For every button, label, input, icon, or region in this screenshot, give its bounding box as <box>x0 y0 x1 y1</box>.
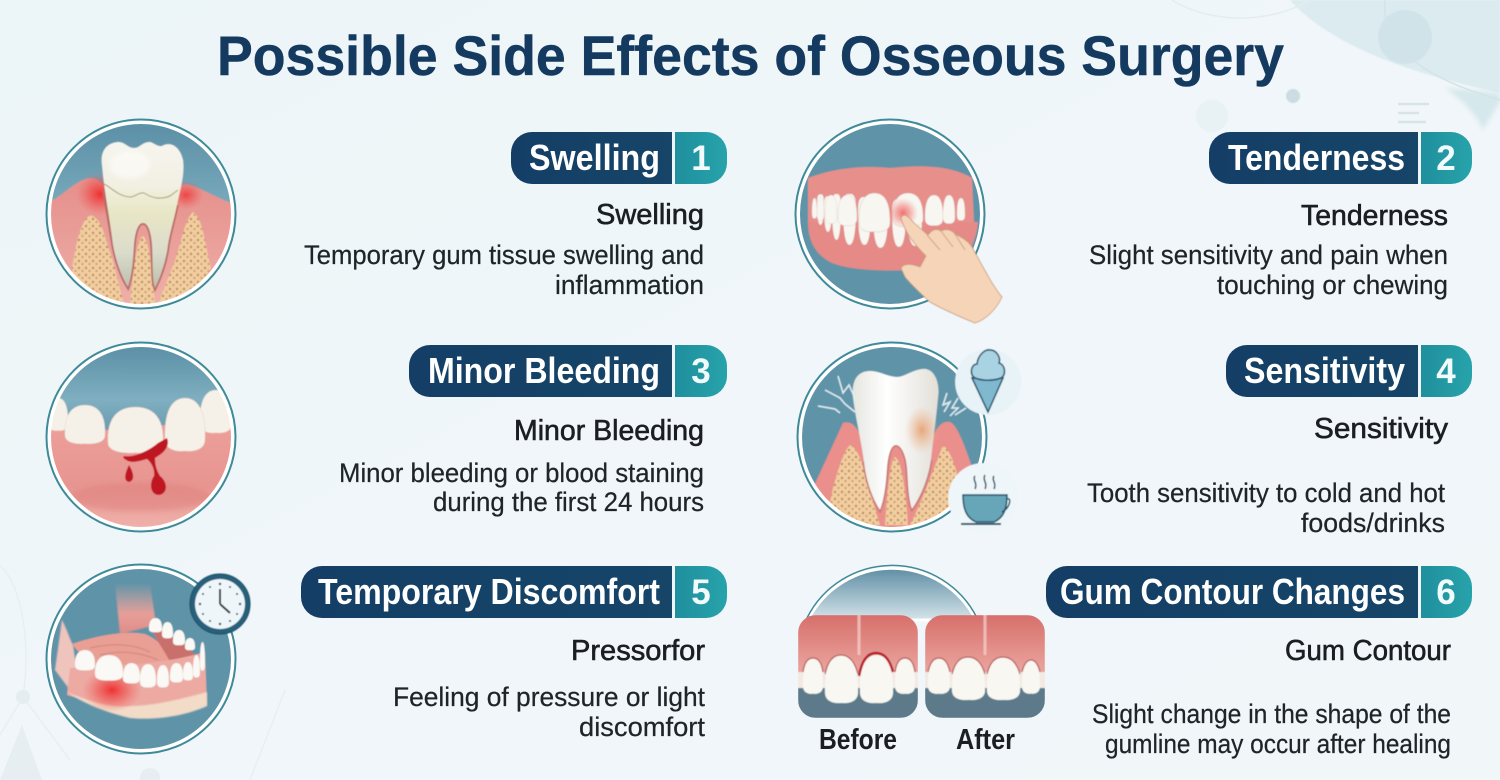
icon: lower jaw with sore spot <box>46 564 250 754</box>
icon: clock <box>190 574 250 634</box>
heading: Sensitivity <box>1314 413 1449 445</box>
panel: sensitivity <box>798 342 1472 538</box>
label pill <box>511 132 727 184</box>
icon: hot drink <box>948 463 1018 533</box>
label pill <box>1209 132 1472 184</box>
icon: sensitive tooth with ice cream and hot drink <box>798 342 1021 533</box>
icon: ice cream <box>955 349 1021 415</box>
heading: Minor Bleeding <box>514 415 704 447</box>
label pill: Swelling <box>529 137 660 178</box>
icon: finger pressing tender gum <box>796 120 1002 323</box>
icon: swollen gum around a molar <box>45 120 240 310</box>
description: Slight sensitivity and pain when <box>1089 240 1448 270</box>
panel: swelling <box>45 120 727 310</box>
label pill: Gum Contour Changes <box>1060 571 1405 612</box>
description <box>393 682 705 742</box>
label pill: 4 <box>1436 352 1456 391</box>
icon: before and after gumline comparison <box>798 565 1045 756</box>
description: gumline may occur after healing <box>1105 729 1451 759</box>
description <box>1089 240 1448 300</box>
title: Possible Side Effects of Osseous Surgery <box>217 24 1284 87</box>
heading: Tenderness <box>1301 200 1448 232</box>
label pill: Tenderness <box>1228 137 1405 178</box>
label pill: 3 <box>691 352 711 391</box>
before label: Before <box>819 724 897 756</box>
panel: tenderness <box>796 120 1472 323</box>
label pill: 2 <box>1436 139 1456 178</box>
label pill <box>1226 345 1472 397</box>
description: foods/drinks <box>1301 508 1445 538</box>
description: touching or chewing <box>1217 270 1448 300</box>
panel: temporary discomfort <box>46 564 727 754</box>
label pill: Sensitivity <box>1244 350 1405 391</box>
description: during the first 24 hours <box>433 487 704 517</box>
panel: gum contour changes <box>798 565 1472 759</box>
after label: After <box>956 724 1015 756</box>
description: Feeling of pressure or light <box>393 682 705 712</box>
label pill: 1 <box>691 139 711 178</box>
before card <box>798 615 918 718</box>
label pill: 5 <box>691 573 711 612</box>
after card <box>925 615 1045 718</box>
description <box>1087 478 1445 538</box>
description <box>339 458 704 517</box>
description: Minor bleeding or blood staining <box>339 458 704 488</box>
icon: bleeding gum below lower teeth <box>45 342 236 532</box>
description: Slight change in the shape of the <box>1092 699 1451 729</box>
description: Tooth sensitivity to cold and hot <box>1087 478 1445 508</box>
description <box>1092 699 1451 759</box>
description: discomfort <box>579 712 705 742</box>
description <box>304 240 704 300</box>
heading: Swelling <box>596 199 704 231</box>
label pill: 6 <box>1436 573 1456 612</box>
label pill: Minor Bleeding <box>428 350 660 391</box>
heading: Gum Contour <box>1285 635 1451 667</box>
heading: Pressorfor <box>571 635 705 667</box>
label pill <box>409 345 727 397</box>
label pill: Temporary Discomfort <box>318 571 660 612</box>
description: inflammation <box>555 270 704 300</box>
description: Temporary gum tissue swelling and <box>304 240 704 270</box>
panel: minor bleeding <box>45 342 727 532</box>
